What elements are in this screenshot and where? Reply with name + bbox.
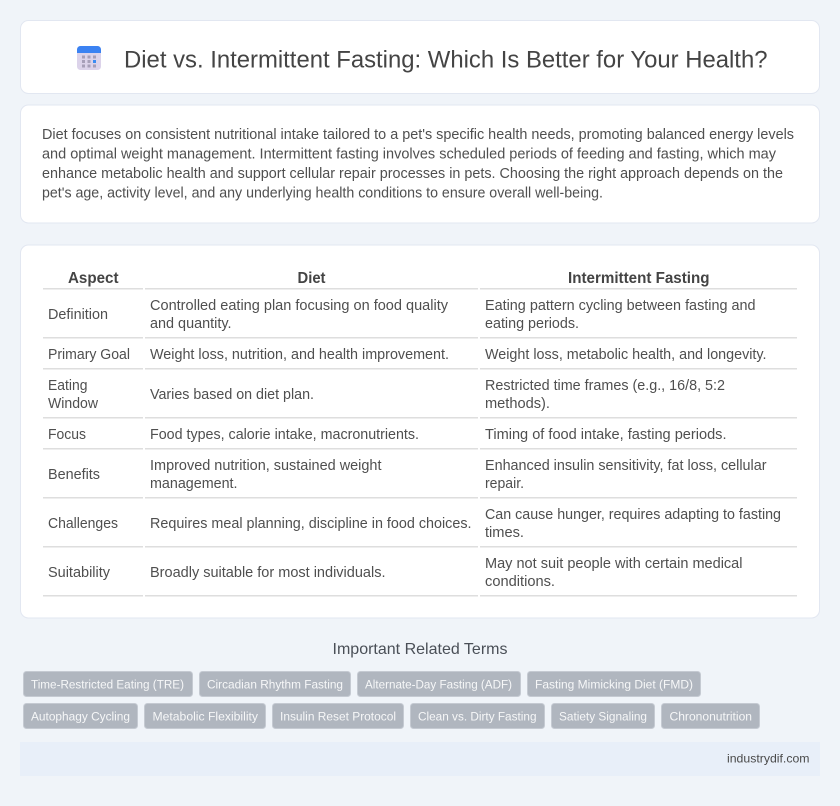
chip: Satiety Signaling bbox=[552, 704, 654, 728]
row: Suitability: May not suit people with certain medical bbox=[485, 556, 742, 572]
row: Suitability: conditions. bbox=[485, 574, 555, 590]
row: Eating Window: Restricted time frames (e.g., 16/8, 5:2 bbox=[485, 378, 725, 394]
chip: Chrononutrition bbox=[662, 704, 760, 728]
chip: Fasting Mimicking Diet (FMD) bbox=[528, 672, 700, 696]
row: Suitability: Broadly suitable for most individuals. bbox=[150, 565, 386, 581]
row: Primary Goal: Weight loss, nutrition, and health improvement. bbox=[150, 347, 449, 363]
row: Eating Window: Varies based on diet plan. bbox=[150, 387, 314, 403]
row: Eating Window: Eating bbox=[48, 378, 88, 394]
heading: important related terms: Important Related Terms bbox=[332, 641, 508, 658]
row: Eating Window: Window bbox=[48, 396, 99, 412]
chip: Alternate-Day Fasting (ADF) bbox=[358, 672, 520, 696]
row: Eating Window bbox=[48, 378, 725, 412]
row: Suitability bbox=[48, 556, 742, 590]
row: Focus: Food types, calorie intake, macronutrients. bbox=[150, 427, 419, 443]
row: Benefits bbox=[48, 458, 767, 492]
chip: Chrononutrition: Chrononutrition bbox=[670, 709, 752, 723]
row: Challenges: Requires meal planning, discipline in food choices. bbox=[150, 516, 472, 532]
row: Definition: Definition bbox=[48, 307, 108, 323]
panel: related term chips bbox=[24, 672, 760, 728]
chip: Circadian Rhythm Fasting: Circadian Rhythm Fasting bbox=[207, 677, 343, 691]
text block: introduction paragraph: pet's age, activity level, and any underlying health conditions to ensure overall well-being. bbox=[42, 186, 603, 202]
chip: Autophagy Cycling bbox=[24, 704, 138, 728]
row: Challenges bbox=[48, 507, 781, 541]
chip: Insulin Reset Protocol bbox=[272, 704, 404, 728]
row: Benefits: Improved nutrition, sustained weight bbox=[150, 458, 382, 474]
panel: comparison table bbox=[20, 245, 820, 618]
footer bar bbox=[20, 742, 820, 776]
chip: Insulin Reset Protocol: Insulin Reset Protocol bbox=[280, 709, 396, 723]
chip: Autophagy Cycling: Autophagy Cycling bbox=[31, 709, 130, 723]
row: Primary Goal: Primary Goal bbox=[48, 347, 130, 363]
row: Suitability: Suitability bbox=[48, 565, 111, 581]
chip: Satiety Signaling: Satiety Signaling bbox=[559, 709, 647, 723]
row: Definition: Controlled eating plan focusing on food quality bbox=[150, 298, 449, 314]
text block: introduction paragraph: and optimal weight management. Intermittent fasting involves scheduled periods of feeding and fasting, which may bbox=[42, 146, 777, 162]
row: Challenges: Challenges bbox=[48, 516, 118, 532]
row: Primary Goal: Weight loss, metabolic health, and longevity. bbox=[485, 347, 766, 363]
row: Eating Window: methods). bbox=[485, 396, 550, 412]
row: Focus: Focus bbox=[48, 427, 86, 443]
row: Definition: Eating pattern cycling between fasting and bbox=[485, 298, 756, 314]
chip: Metabolic Flexibility bbox=[144, 704, 266, 728]
row: Benefits: management. bbox=[150, 476, 238, 492]
chip: Alternate-Day Fasting (ADF): Alternate-Day Fasting (ADF) bbox=[365, 677, 512, 691]
table header row bbox=[68, 270, 710, 287]
text block: introduction paragraph: enhance metabolic health and support cellular repair processes in pets. Choosing the right approach depends on the bbox=[42, 166, 783, 182]
row: Challenges: times. bbox=[485, 525, 524, 541]
table header row: Aspect bbox=[68, 270, 118, 287]
table header row: Diet bbox=[298, 270, 326, 287]
row: Benefits: Enhanced insulin sensitivity, fat loss, cellular bbox=[485, 458, 767, 474]
title: Diet vs. Intermittent Fasting: Which Is Better for Your Health? bbox=[124, 46, 768, 74]
row: Definition: eating periods. bbox=[485, 316, 579, 332]
text block: introduction paragraph bbox=[42, 127, 794, 202]
footer source text: industrydif.com bbox=[727, 752, 810, 766]
chip: Clean vs. Dirty Fasting bbox=[410, 704, 544, 728]
table header row: Intermittent Fasting bbox=[568, 270, 710, 287]
row: Definition: and quantity. bbox=[150, 316, 232, 332]
chip: Time-Restricted Eating (TRE): Time-Restricted Eating (TRE) bbox=[31, 677, 184, 691]
row: Challenges: Can cause hunger, requires adapting to fasting bbox=[485, 507, 781, 523]
row: Benefits: Benefits bbox=[48, 467, 100, 483]
chip: Circadian Rhythm Fasting bbox=[200, 672, 350, 696]
text block: introduction paragraph: Diet focuses on consistent nutritional intake tailored to a pet's specific health needs, promoting balanced energy levels bbox=[42, 127, 794, 143]
row: Benefits: repair. bbox=[485, 476, 524, 492]
icon: calendar bbox=[77, 46, 101, 70]
row: Primary Goal bbox=[48, 347, 766, 363]
chip: Clean vs. Dirty Fasting: Clean vs. Dirty Fasting bbox=[418, 709, 536, 723]
chip: Metabolic Flexibility: Metabolic Flexibility bbox=[152, 709, 259, 723]
chip: Fasting Mimicking Diet (FMD): Fasting Mimicking Diet (FMD) bbox=[535, 677, 693, 691]
row: Focus bbox=[48, 427, 726, 443]
row: Definition bbox=[48, 298, 756, 332]
row: Focus: Timing of food intake, fasting periods. bbox=[485, 427, 726, 443]
panel: header bbox=[20, 20, 820, 94]
panel: introduction bbox=[20, 105, 820, 223]
chip: Time-Restricted Eating (TRE) bbox=[24, 672, 192, 696]
